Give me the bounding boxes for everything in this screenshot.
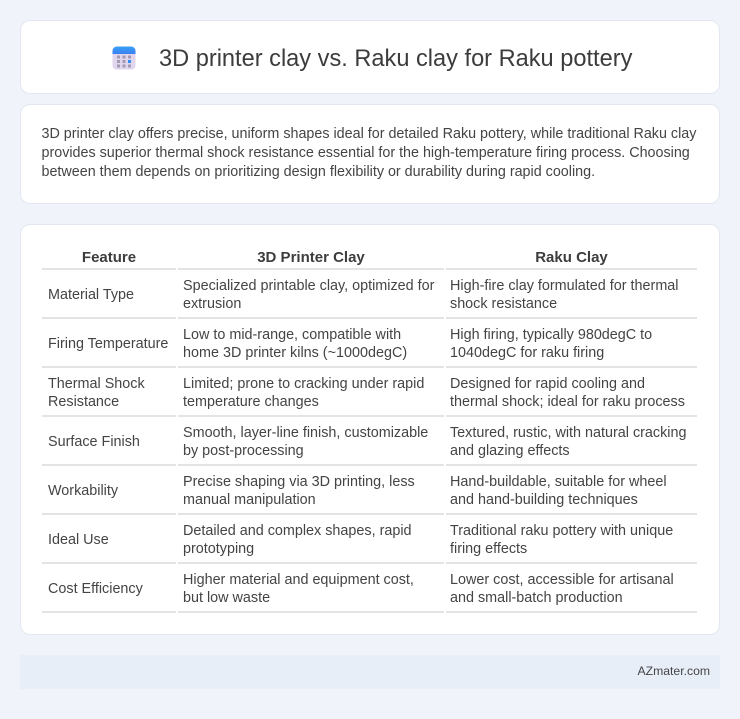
row: workability: Precise shaping via 3D printing, less [183,474,415,490]
row: firing temperature: home 3D printer kilns (~1000degC) [183,345,407,361]
header card [20,20,720,94]
row: surface finish: Smooth, layer-line finish, customizable [183,425,428,441]
table header [82,249,608,266]
footer bar [20,655,720,689]
row: material type: shock resistance [450,296,557,312]
row: firing temperature [48,327,652,361]
intro text [42,126,696,180]
row: thermal shock resistance: Limited; prone to cracking under rapid [183,376,424,392]
row: ideal use: Ideal Use [48,532,109,548]
row: workability [48,474,667,508]
row: surface finish: Textured, rustic, with natural cracking [450,425,686,441]
row: ideal use: firing effects [450,541,527,557]
row: cost efficiency [48,572,674,606]
row: firing temperature: Low to mid-range, compatible with [183,327,401,343]
row: cost efficiency: and small-batch production [450,590,623,606]
row: ideal use: Detailed and complex shapes, rapid [183,523,412,539]
row: surface finish: Surface Finish [48,434,140,450]
row: material type [48,278,678,312]
row: material type: High-fire clay formulated for thermal [450,278,678,294]
row: material type: Specialized printable clay, optimized for [183,278,434,294]
row: cost efficiency: Higher material and equipment cost, [183,572,414,588]
row: surface finish [48,425,686,459]
intro text: provides superior thermal shock resistance essential for the high-temperature firing process. Choosing [42,145,690,161]
row: thermal shock resistance: thermal shock; ideal for raku process [450,394,685,410]
footer credit: AZmater.com [638,664,710,678]
row: workability: Hand-buildable, suitable for wheel [450,474,667,490]
intro text: 3D printer clay offers precise, uniform shapes ideal for detailed Raku pottery, while traditional Raku clay [42,126,696,142]
row: thermal shock resistance: Thermal Shock [48,376,145,392]
table card [20,224,720,635]
row: material type: extrusion [183,296,241,312]
intro text: between them depends on prioritizing design flexibility or durability during rapid cooling. [42,164,595,180]
row: cost efficiency: but low waste [183,590,270,606]
table header: Raku Clay [535,249,608,266]
row: firing temperature: 1040degC for raku firing [450,345,604,361]
row: thermal shock resistance: temperature changes [183,394,319,410]
row: thermal shock resistance: Resistance [48,394,119,410]
row: workability: and hand-building techniques [450,492,638,508]
title: 3D printer clay vs. Raku clay for Raku pottery [159,46,632,72]
row: workability: manual manipulation [183,492,316,508]
row: cost efficiency: Lower cost, accessible for artisanal [450,572,674,588]
row: thermal shock resistance: Designed for rapid cooling and [450,376,645,392]
row: firing temperature: High firing, typically 980degC to [450,327,652,343]
row: surface finish: and glazing effects [450,443,570,459]
row: ideal use: prototyping [183,541,254,557]
row: ideal use [48,523,673,557]
table header: 3D Printer Clay [257,249,365,266]
row: ideal use: Traditional raku pottery with unique [450,523,673,539]
row: surface finish: by post-processing [183,443,304,459]
row: thermal shock resistance [48,376,685,410]
row: cost efficiency: Cost Efficiency [48,581,143,597]
row: material type: Material Type [48,287,134,303]
row: workability: Workability [48,483,118,499]
icon: calendar [112,46,136,70]
intro card [20,104,720,204]
row: firing temperature: Firing Temperature [48,336,168,352]
table header: Feature [82,249,136,266]
